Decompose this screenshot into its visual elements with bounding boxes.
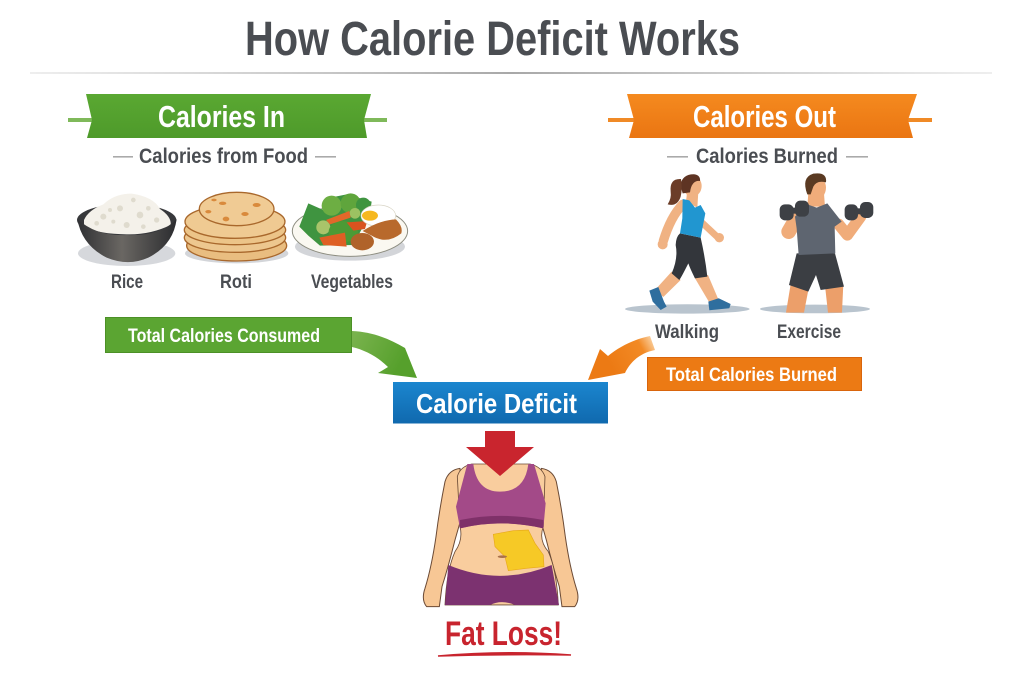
- box: total calories consumed: [105, 317, 352, 353]
- subheading: calories burned: Calories Burned: [696, 145, 838, 168]
- banner: calories out: [608, 94, 932, 138]
- panel: calories in: [68, 94, 408, 293]
- arrow: burned to deficit: [588, 336, 655, 380]
- banner: calories in: Calories In: [158, 99, 285, 134]
- label: roti: Roti: [220, 272, 252, 293]
- label: exercise: Exercise: [777, 322, 841, 343]
- banner: calories out: Calories Out: [693, 99, 836, 134]
- label: fat loss: Fat Loss!: [445, 615, 562, 653]
- box: calorie deficit: [393, 382, 608, 424]
- box: total calories consumed: Total Calories Consumed: [128, 326, 320, 347]
- label: walking: Walking: [655, 322, 719, 343]
- label: vegetables: Vegetables: [311, 272, 393, 293]
- icon: exercising man: [760, 173, 873, 313]
- box: total calories burned: [647, 357, 862, 391]
- arrow: deficit to fat loss: [466, 431, 534, 476]
- icon: rice bowl: [77, 194, 177, 266]
- title: How Calorie Deficit Works: [245, 13, 740, 66]
- label: rice: Rice: [111, 272, 143, 293]
- icon: vegetable plate: [292, 193, 408, 261]
- icon: walking woman: [625, 174, 750, 314]
- icon: roti stack: [184, 192, 288, 263]
- illustration: body with belly fat: [423, 464, 578, 607]
- banner: calories in: [68, 94, 387, 138]
- arrow: consumed to deficit: [352, 331, 417, 378]
- box: calorie deficit: Calorie Deficit: [416, 388, 577, 419]
- subheading: calories from food: Calories from Food: [139, 145, 308, 168]
- panel: calories out: [608, 94, 932, 343]
- box: total calories burned: Total Calories Burned: [666, 365, 837, 386]
